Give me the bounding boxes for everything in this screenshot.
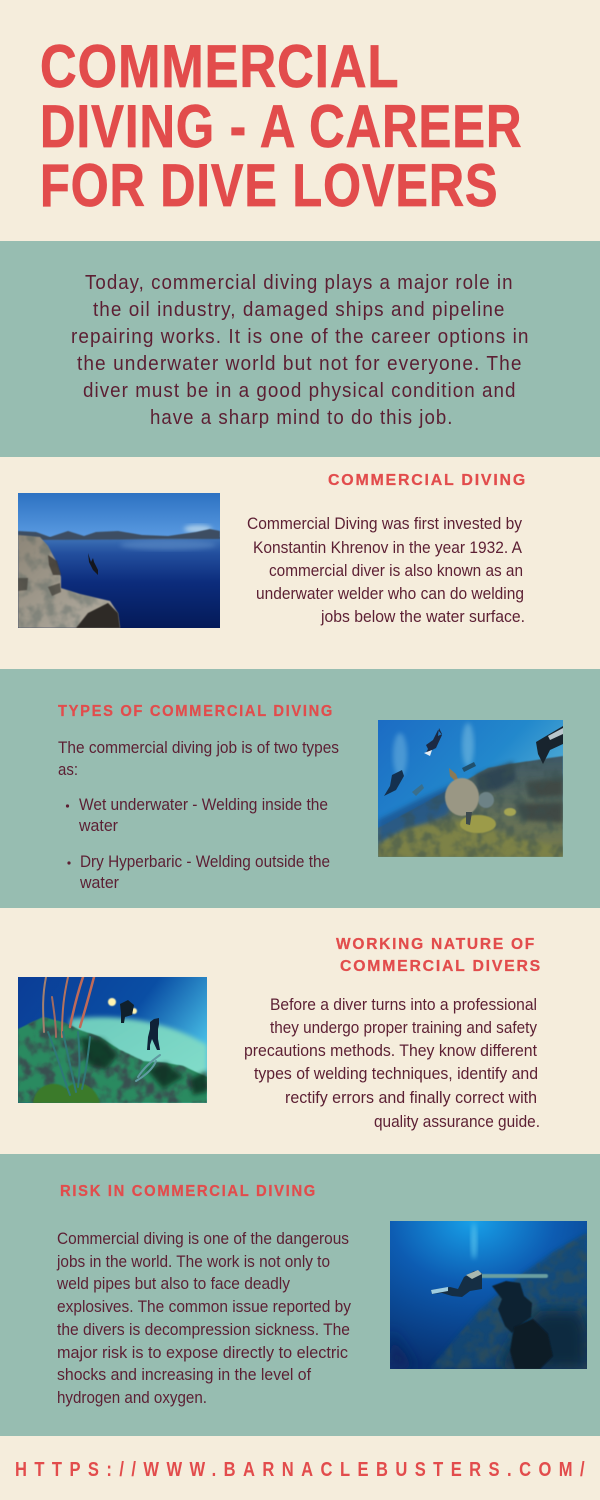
- text block: commercial diving description: [247, 514, 525, 626]
- text block: commercial diving description: Konstantin Khrenov in the year 1932. A: [253, 538, 523, 557]
- text block: working nature description: types of welding techniques, identify and: [254, 1064, 538, 1083]
- text block: types introduction: The commercial diving job is of two types: [58, 738, 339, 757]
- panel: risk in commercial diving: [0, 1154, 600, 1436]
- heading: working nature of commercial divers: COMMERCIAL DIVERS: [340, 958, 542, 975]
- photo: diver beside a dark deep-water reef: [390, 1221, 587, 1369]
- text block: working nature description: precautions methods. They know different: [244, 1041, 537, 1060]
- title: [40, 33, 522, 219]
- text block: working nature description: [244, 995, 540, 1131]
- text block: commercial diving description: commercial diver is also known as an: [269, 561, 523, 580]
- panel: introduction: [0, 241, 600, 457]
- panel: working nature of commercial divers: [0, 908, 600, 1154]
- panel: types of commercial diving: [0, 669, 600, 908]
- text block: risk description: weld pipes but also to face deadly: [56, 1274, 290, 1293]
- text block: working nature description: they undergo proper training and safety: [270, 1018, 537, 1037]
- text block: risk description: hydrogen and oxygen.: [57, 1388, 207, 1407]
- text block: risk description: [56, 1229, 351, 1407]
- heading: working nature of commercial divers: [336, 936, 542, 975]
- text block: commercial diving description: jobs below the water surface.: [320, 607, 525, 626]
- text block: commercial diving description: underwater welder who can do welding: [256, 584, 524, 603]
- panel: introduction: the underwater world but not for everyone. The: [77, 353, 522, 375]
- list item: dry hyperbaric: Dry Hyperbaric - Welding outside the: [80, 852, 330, 871]
- heading: working nature of commercial divers: WORKING NATURE OF: [336, 936, 536, 953]
- panel: introduction: the oil industry, damaged ships and pipeline: [93, 299, 506, 321]
- heading: types of commercial diving: TYPES OF COMMERCIAL DIVING: [58, 703, 334, 720]
- list item: wet underwater: [66, 795, 328, 835]
- text block: risk description: Commercial diving is one of the dangerous: [57, 1229, 349, 1248]
- text block: working nature description: rectify errors and finally correct with: [285, 1088, 537, 1107]
- text block: risk description: shocks and increasing in the level of: [57, 1365, 311, 1384]
- text block: risk description: the divers is decompression sickness. The: [57, 1320, 350, 1339]
- panel: introduction: have a sharp mind to do this job.: [150, 407, 454, 429]
- list item: dry hyperbaric: water: [79, 873, 119, 892]
- panel: introduction: diver must be in a good physical condition and: [83, 380, 516, 402]
- panel: introduction: Today, commercial diving plays a major role in: [85, 272, 514, 294]
- text block: risk description: jobs in the world. The work is not only to: [56, 1252, 330, 1271]
- list item: wet underwater: Wet underwater - Welding inside the: [79, 795, 328, 814]
- heading: risk in commercial diving: RISK IN COMMERCIAL DIVING: [60, 1183, 317, 1200]
- list item: wet underwater: water: [78, 816, 118, 835]
- text block: types introduction: [58, 738, 339, 779]
- panel: introduction: repairing works. It is one of the career options in: [71, 326, 530, 348]
- title: COMMERCIAL: [40, 33, 400, 100]
- list item: dry hyperbaric: [67, 852, 330, 892]
- text block: types introduction: as:: [58, 760, 78, 779]
- text block: risk description: major risk is to expose directly to electric: [57, 1343, 348, 1362]
- photo: divers and a sea turtle over a reef: [378, 720, 563, 857]
- title: FOR DIVE LOVERS: [40, 152, 498, 219]
- text block: risk description: explosives. The common issue reported by: [57, 1297, 351, 1316]
- photo: two divers above sand and coral: [18, 977, 207, 1103]
- text block: working nature description: quality assurance guide.: [374, 1112, 540, 1131]
- text block: working nature description: Before a diver turns into a professional: [270, 995, 537, 1014]
- heading: commercial diving: COMMERCIAL DIVING: [328, 472, 527, 489]
- photo: diver jumping from a cliff into a lake: [18, 493, 220, 628]
- panel: commercial diving: [0, 457, 600, 669]
- text block: commercial diving description: Commercial Diving was first invested by: [247, 514, 522, 533]
